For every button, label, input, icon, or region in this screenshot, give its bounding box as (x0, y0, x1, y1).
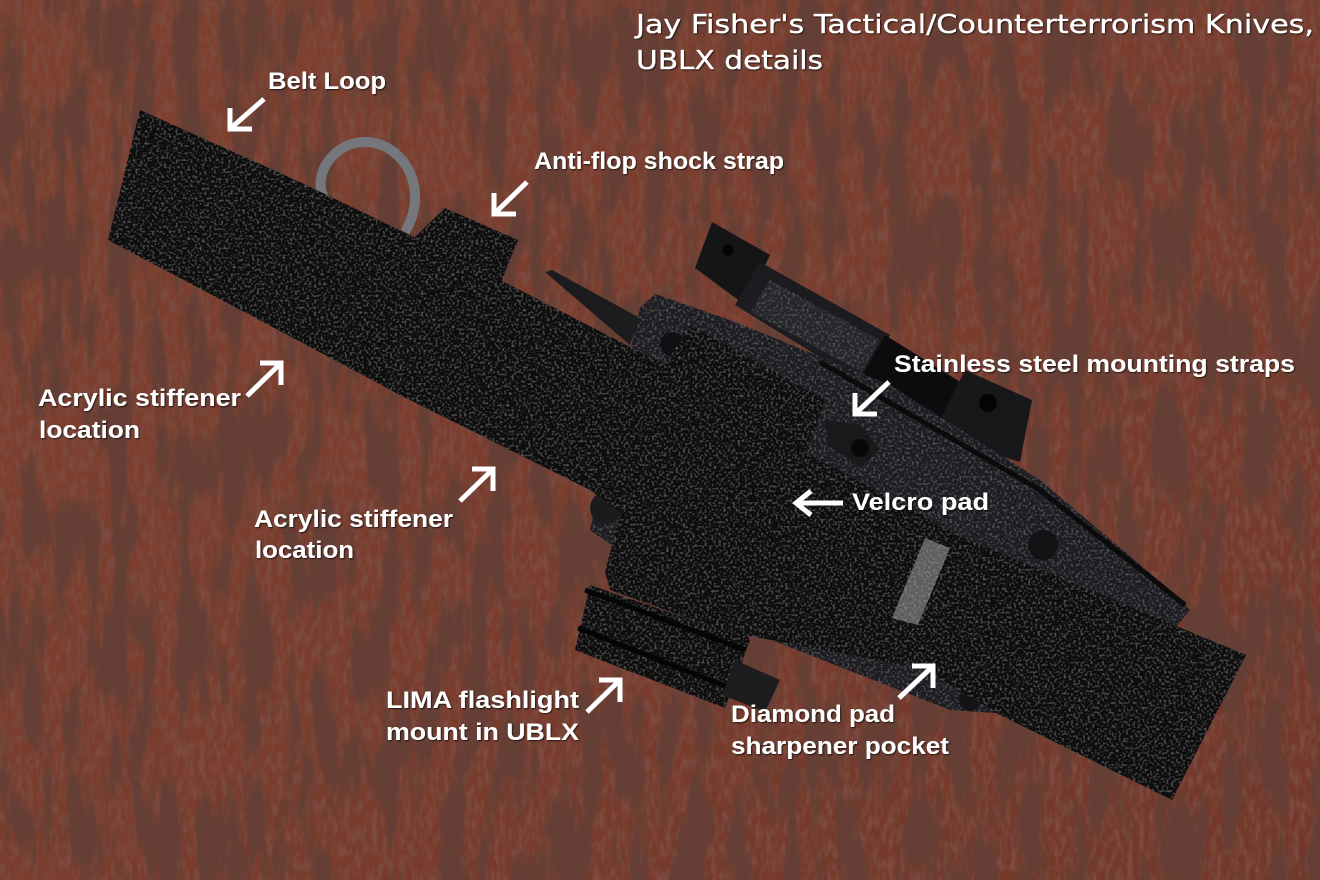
label: stainless steel mounting straps: Stainless steel mounting straps (894, 351, 1295, 378)
label: stainless steel mounting straps (855, 351, 1295, 414)
label: LIMA flashlight mount: LIMA flashlight (386, 687, 579, 714)
photo: sharpener tab (892, 538, 950, 625)
label: acrylic stiffener location 1 (38, 363, 281, 444)
label: diamond pad sharpener pocket: Diamond pad (731, 701, 895, 728)
label: diamond pad sharpener pocket: sharpener pocket (731, 733, 949, 760)
photo: flashlight mounted behind sheath (695, 222, 1032, 462)
photo: anti-flop shock strap (412, 208, 518, 285)
label: belt loop (230, 68, 386, 129)
title second line: UBLX details (636, 46, 823, 76)
label: acrylic stiffener location 1: Acrylic stiffener (38, 385, 241, 412)
label: anti-flop shock strap (494, 148, 784, 214)
label: LIMA flashlight mount (386, 680, 620, 746)
photo: belt loop strap (108, 110, 665, 512)
photo: diamond pad sharpener pocket (900, 530, 1246, 800)
label: diamond pad sharpener pocket (731, 666, 949, 760)
label: acrylic stiffener location 1: location (39, 417, 140, 444)
title: Jay Fisher's Tactical/Counterterrorism Knives, (634, 10, 1314, 40)
photo: kydex sheath body (590, 294, 1190, 720)
photo: LIMA flashlight mount (575, 585, 780, 712)
photo: knife handle ring (321, 142, 415, 232)
label: acrylic stiffener location 2 (254, 469, 493, 564)
label: velcro pad: Velcro pad (852, 489, 989, 516)
label: LIMA flashlight mount: mount in UBLX (386, 719, 579, 746)
label: velcro pad (796, 489, 989, 516)
label: acrylic stiffener location 2: location (255, 537, 354, 564)
label: anti-flop shock strap: Anti-flop shock strap (534, 148, 784, 175)
photo: knife tang bar (545, 270, 640, 345)
photo: vertical webbing strap with velcro (605, 325, 825, 640)
label: belt loop: Belt Loop (268, 68, 386, 95)
photo: lower sheath webbing (745, 450, 950, 665)
label: acrylic stiffener location 2: Acrylic stiffener (254, 506, 453, 533)
